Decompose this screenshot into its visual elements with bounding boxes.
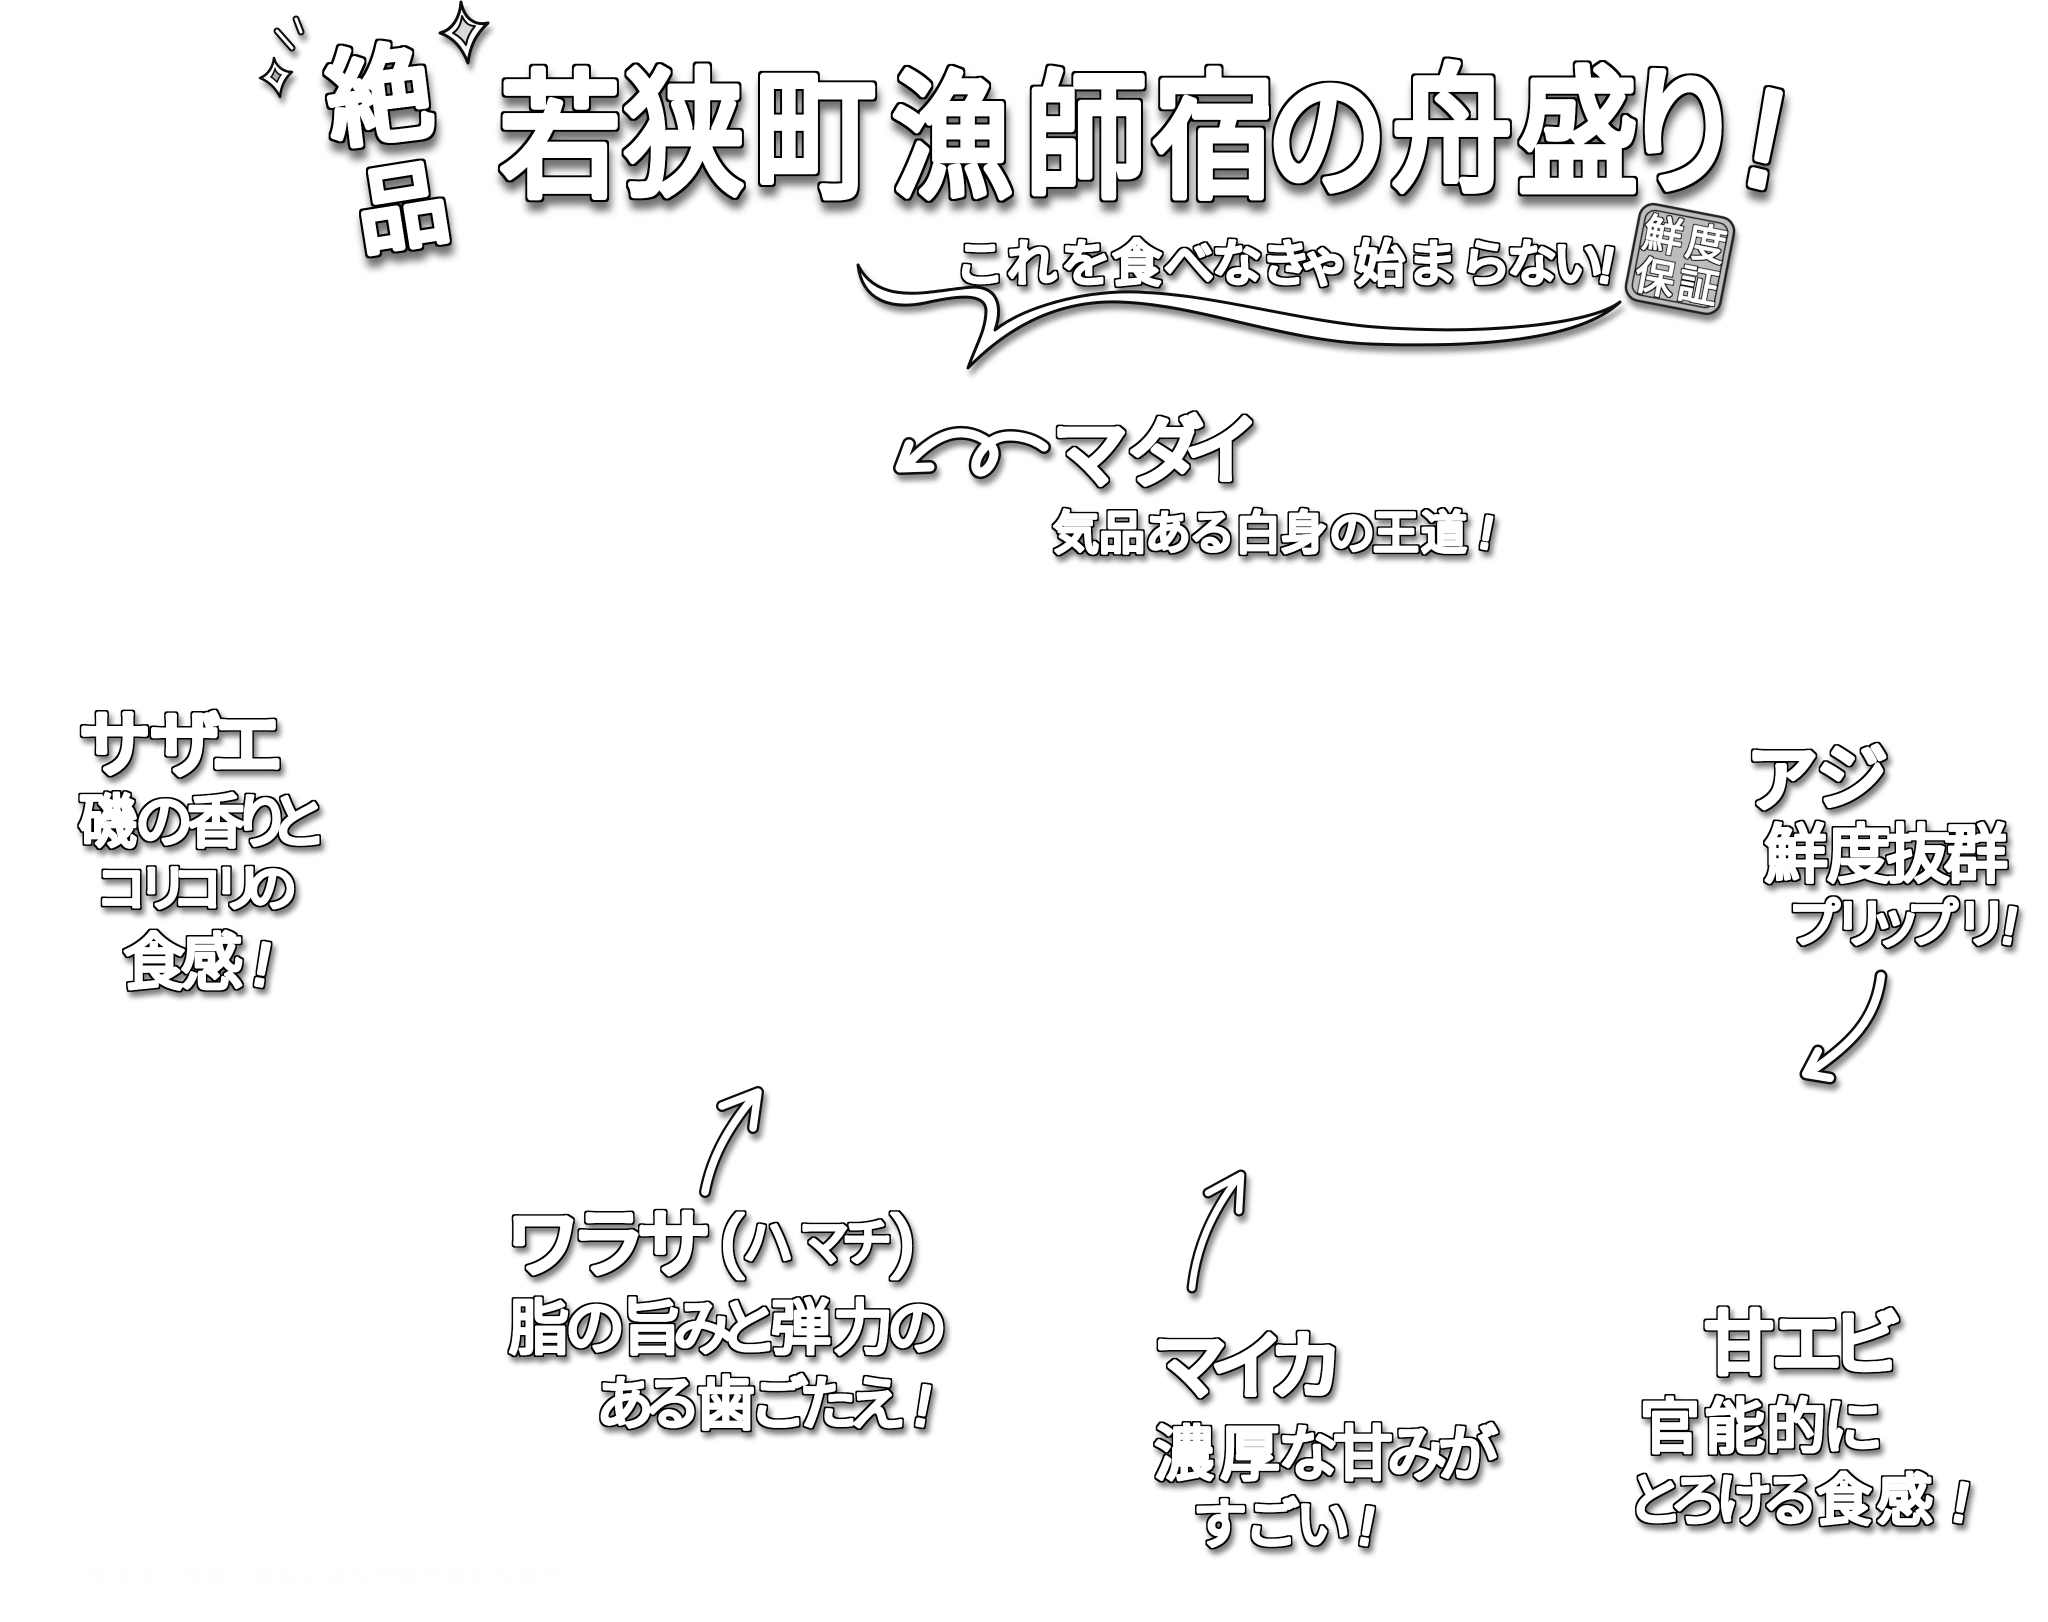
callout: マダイ (900, 409, 1497, 559)
text: アジ description: 鮮度抜群 (1764, 819, 2008, 891)
title block (260, 2, 1796, 368)
label: マダイ: マダイ (1052, 409, 1260, 498)
stamp: 鮮度保証: 保証 (1631, 253, 1722, 312)
heading: 絶品: 絶 (320, 32, 439, 162)
text: サザエ description: 磯の香りと (79, 790, 327, 855)
label: ワラサ(ハマチ) (506, 1201, 915, 1286)
heading: main title: 若狭町漁師宿の舟盛り! (499, 54, 1796, 219)
stamp: 鮮度保証 (1624, 202, 1736, 316)
arrow: マイカ (1192, 1175, 1241, 1288)
text: サザエ description (79, 790, 327, 1001)
heading: 絶品 (320, 32, 456, 267)
label: ワラサ(ハマチ): ハマチ (743, 1215, 892, 1271)
callout: アジ (1746, 739, 2022, 1078)
label: サザエ: サザエ (79, 706, 283, 786)
label: アジ: アジ (1746, 739, 1888, 821)
text: 甘エビ description: とろける食感! (1627, 1469, 1974, 1535)
text: ワラサ description: ある歯ごたえ! (596, 1372, 937, 1440)
text: サザエ description: コリコリの (96, 861, 297, 917)
footnote: ※一例です。季節・海況により内容が変わります。 (39, 1563, 585, 1590)
callout: 甘エビ (1627, 1305, 1974, 1535)
label: 甘エビ: 甘エビ (1704, 1305, 1902, 1383)
arrow: マダイ (900, 433, 1044, 472)
stamp: 鮮度保証: 鮮度 (1639, 211, 1730, 270)
text: アジ description: プリップリ! (1788, 896, 2022, 956)
text: マイカ description (1154, 1421, 1498, 1557)
subtitle: これを食べなきゃ始まらない! (955, 236, 1619, 294)
arrow: ワラサ (705, 1092, 758, 1192)
heading: 絶品: 品 (349, 152, 456, 267)
text: マイカ description: すごい! (1193, 1495, 1380, 1557)
swoosh underline (858, 265, 1620, 368)
text: ワラサ description: 脂の旨みと弾力の (509, 1295, 947, 1362)
label: ワラサ(ハマチ): ワラサ (506, 1203, 711, 1286)
label: マイカ: マイカ (1153, 1325, 1343, 1408)
text: 甘エビ description: 官能的に (1640, 1394, 1883, 1461)
label: ワラサ(ハマチ): () (720, 1201, 915, 1279)
callout: マイカ (1153, 1175, 1498, 1557)
text: サザエ description: 食感! (123, 929, 277, 1001)
text: ワラサ description (509, 1295, 947, 1440)
arrow: アジ (1806, 976, 1881, 1078)
text: マダイ description: 気品ある白身の王道! (1053, 506, 1497, 559)
callout: ワラサ (506, 1092, 947, 1440)
text: アジ description (1764, 819, 2022, 956)
icon: sparkles (260, 2, 488, 97)
text: マイカ description: 濃厚な甘みが (1154, 1421, 1498, 1488)
callout: サザエ (79, 706, 327, 1001)
text: 甘エビ description (1627, 1394, 1974, 1535)
